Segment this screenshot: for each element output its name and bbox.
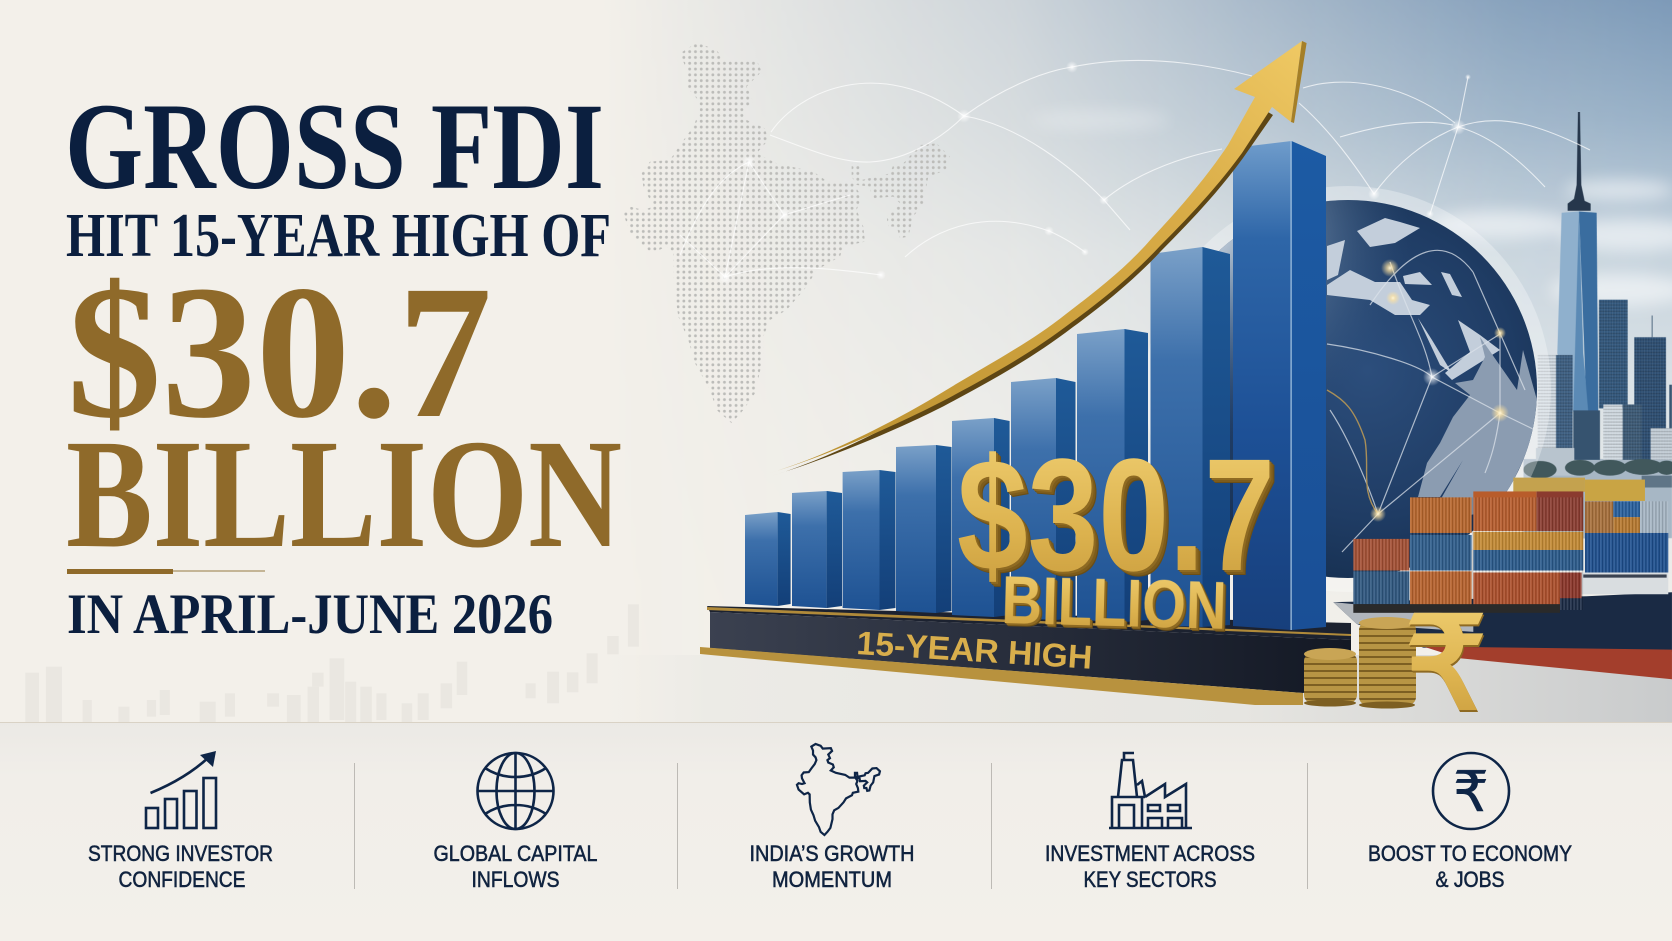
3D value: $30.7 billion: BILLION [1001,562,1228,644]
feature: global capital inflows: GLOBAL CAPITAL [434,841,598,866]
floor [600,655,1672,722]
feature: global capital inflows [434,753,598,892]
icon: rupee coin [1433,753,1509,829]
hull [1333,592,1672,652]
3D value: $30.7 billion [957,425,1275,644]
feature: boost to economy and jobs: BOOST TO ECONOMY [1368,841,1572,866]
feature: india's growth momentum: MOMENTUM [772,867,892,892]
feature: investment across key sectors [1045,753,1255,892]
amount: $30.7 [67,247,492,458]
background [26,0,1672,722]
dotted India map [623,43,950,423]
title line: hit 15-year high of: HIT 15-YEAR HIGH OF [66,202,611,270]
globe [1218,200,1537,578]
icon: rupee coin: ₹ [1453,760,1489,823]
network nodes [717,61,1471,285]
rupee symbol: ₹ [1405,593,1487,736]
feature: investment across key sectors: KEY SECTORS [1084,867,1216,892]
feature: investment across key sectors: INVESTMENT ACROSS [1045,841,1255,866]
date line: IN APRIL-JUNE 2026 [67,583,553,646]
faint candlestick chart [25,604,639,722]
coin stacks [1304,617,1416,708]
feature: india's growth momentum: INDIA’S GROWTH [750,841,914,866]
network connection lines [680,60,1590,277]
city skyline [1523,112,1672,538]
icon: rising bars [146,751,216,828]
icon: india map [797,744,880,835]
title line: gross fdi: GROSS FDI [65,78,604,215]
feature: boost to economy and jobs [1368,753,1572,892]
3D value: $30.7 billion: $30.7 [957,425,1275,604]
feature: strong investor confidence: CONFIDENCE [118,867,246,892]
halo behind bars [1145,186,1551,592]
icon: factory [1109,753,1192,828]
platform base [700,606,1351,705]
feature: strong investor confidence [88,751,273,892]
label: 15-year high: 15-YEAR HIGH [856,624,1093,676]
unit: billion: BILLION [66,407,622,580]
globe routes [1327,250,1535,552]
accent rule [67,569,265,574]
feature: strong investor confidence: STRONG INVESTOR [88,841,273,866]
superstructure [1577,573,1668,594]
feature: boost to economy and jobs: & JOBS [1436,867,1504,892]
container ship [1333,478,1672,679]
clouds [1030,110,1672,306]
icon: globe [478,753,554,829]
feature: india's growth momentum [750,744,914,892]
containers [1353,478,1668,613]
headline text [65,78,622,646]
growth arrow [770,41,1307,476]
feature: global capital inflows: INFLOWS [472,867,560,892]
bottom band [0,722,1672,941]
continents [1327,218,1500,380]
bar chart [745,141,1326,630]
skyscraper [1557,112,1598,412]
